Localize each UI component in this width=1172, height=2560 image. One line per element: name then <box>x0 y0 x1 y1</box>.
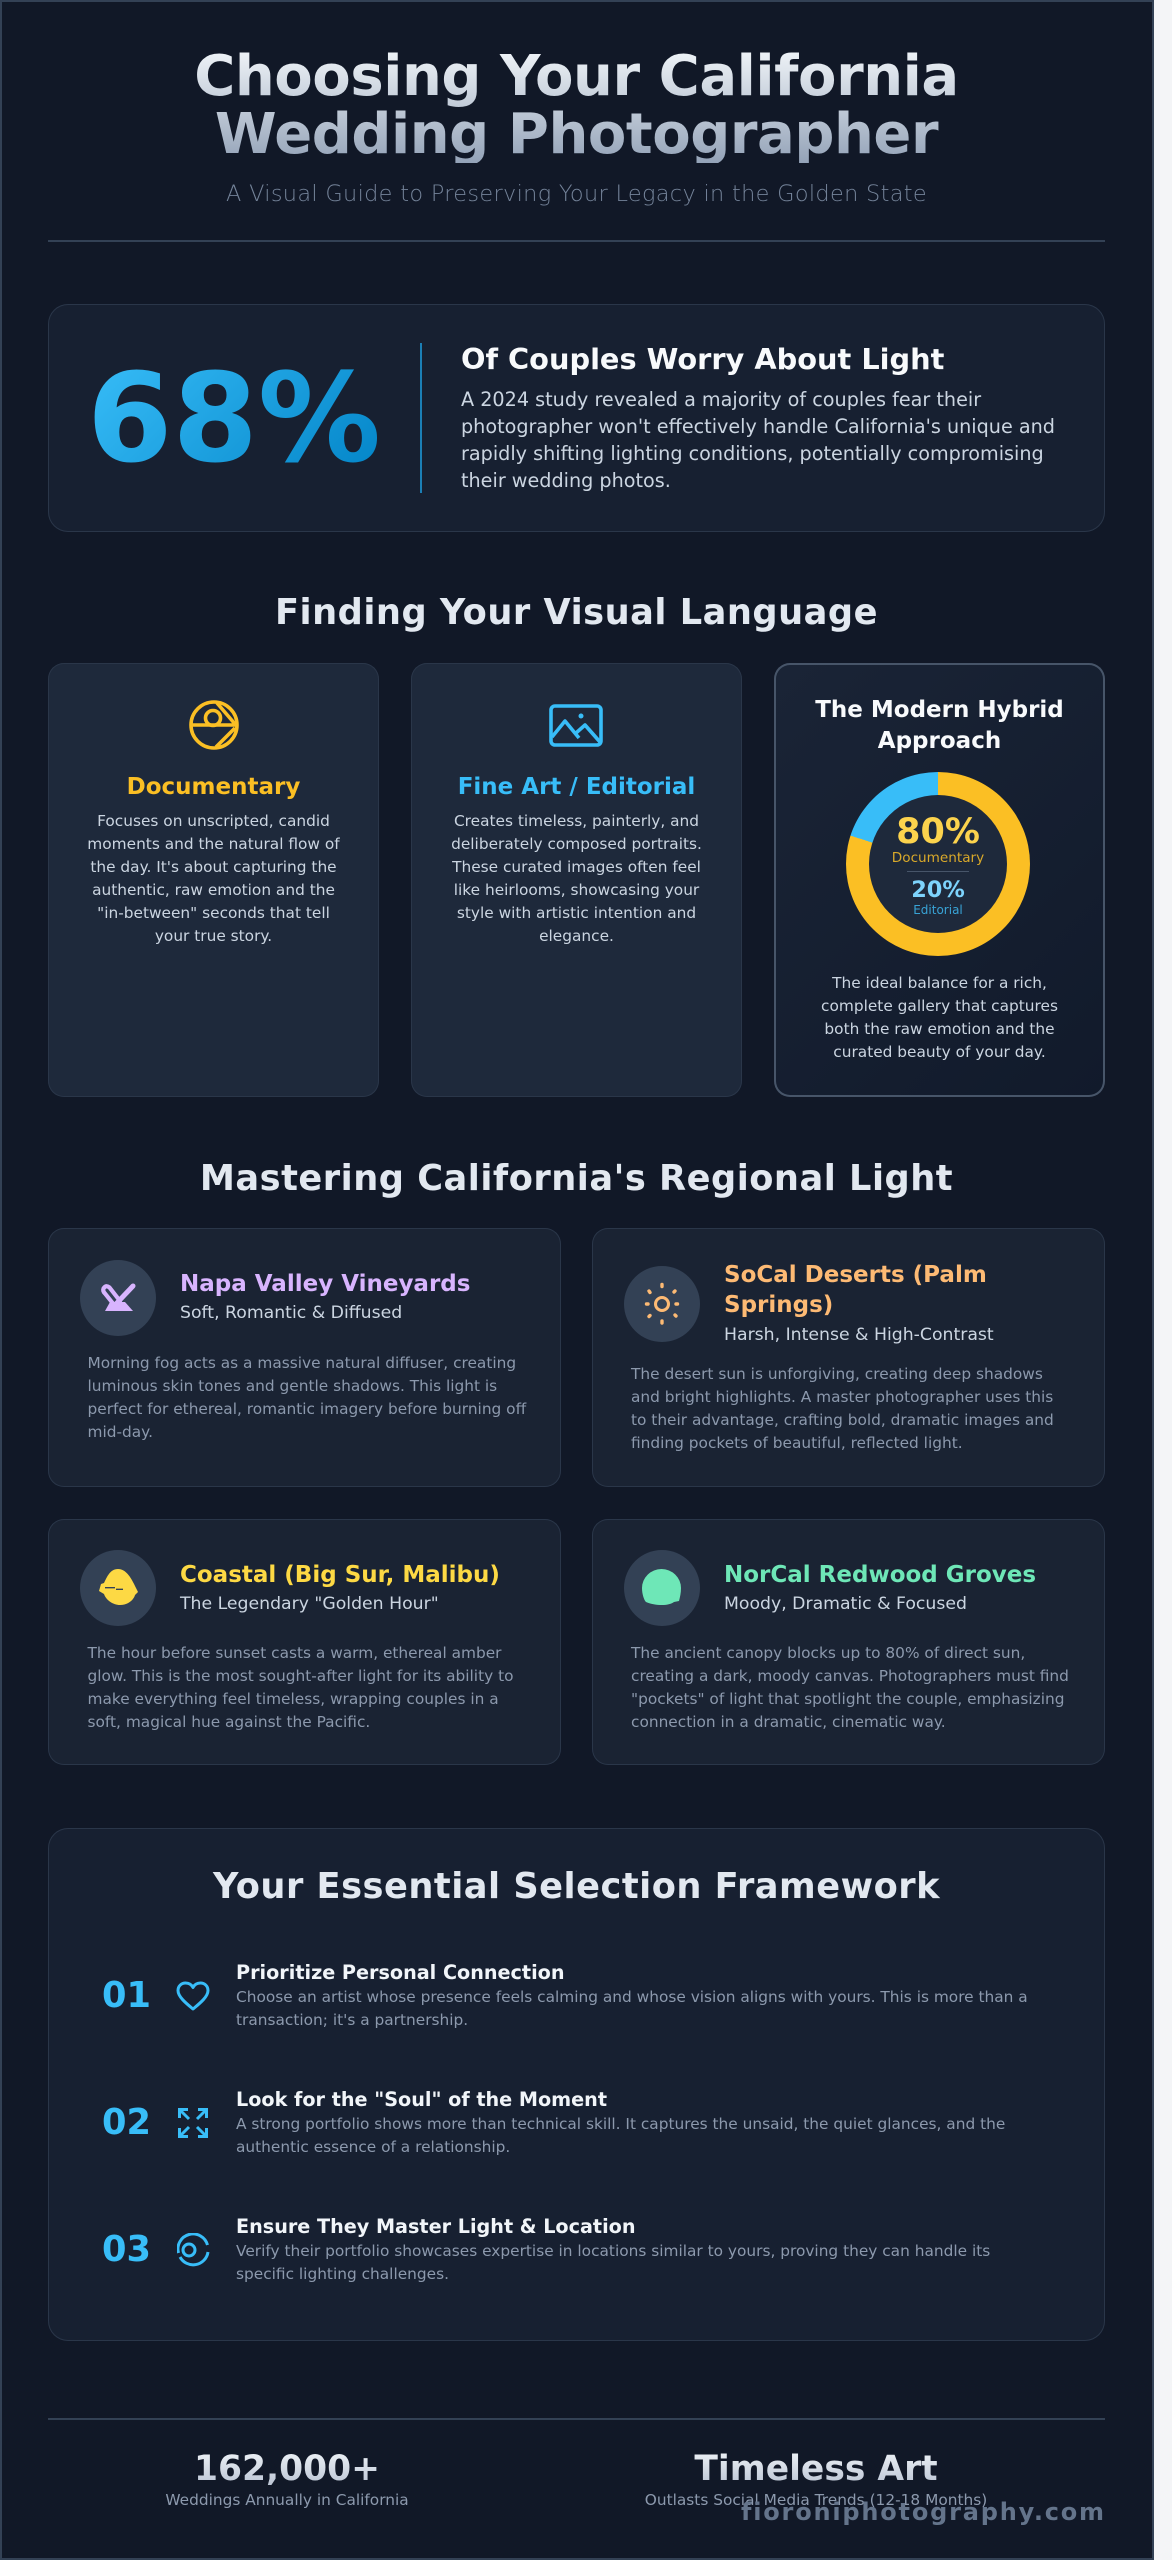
hybrid heading <box>815 696 1064 754</box>
napa subtitle: Soft, Romantic & Diffused <box>180 1303 402 1323</box>
title: Wedding Photographer <box>215 102 938 167</box>
documentary text: the day. It's about capturing the <box>90 858 337 876</box>
napa text: mid-day. <box>88 1423 153 1441</box>
step title: Prioritize Personal Connection <box>236 1961 565 1984</box>
header divider <box>48 240 1105 242</box>
documentary label: Documentary <box>892 850 984 866</box>
hybrid heading: The Modern Hybrid <box>815 696 1064 722</box>
coastal text: glow. This is the most sought-after light for its ability to <box>88 1667 513 1685</box>
number 02: 02 <box>102 2102 151 2143</box>
icon: sun <box>624 1266 700 1342</box>
socal text <box>630 1365 1054 1452</box>
documentary text: authentic, raw emotion and the <box>92 881 335 899</box>
panel: coastal <box>48 1519 561 1765</box>
hero text: A 2024 study revealed a majority of couples fear their <box>461 388 981 411</box>
norcal text <box>630 1644 1069 1731</box>
step text: Verify their portfolio showcases expertise in locations similar to yours, proving they can handle its <box>236 2242 990 2260</box>
coastal text: The hour before sunset casts a warm, ethereal amber <box>88 1644 502 1662</box>
heading: visual language: Finding Your Visual Language <box>275 592 878 633</box>
hero heading: Of Couples Worry About Light <box>461 342 944 376</box>
step 02 <box>102 2088 1005 2156</box>
socal title: SoCal Deserts (Palm <box>724 1262 987 1288</box>
icon: image <box>549 704 603 747</box>
framework heading: Your Essential Selection Framework <box>213 1866 940 1907</box>
coastal text: soft, magical hue against the Pacific. <box>88 1713 370 1731</box>
big stat 68%: 68% <box>87 347 381 490</box>
stat label: Outlasts Social Media Trends (12-18 Months) <box>645 2491 987 2509</box>
heading: regional light: Mastering California's Regional Light <box>200 1158 953 1199</box>
hero text: their wedding photos. <box>461 469 671 492</box>
napa text: Morning fog acts as a massive natural diffuser, creating <box>88 1354 516 1372</box>
icon: wine glasses <box>80 1260 156 1336</box>
socal text: and bright highlights. A master photographer uses this <box>631 1388 1053 1406</box>
norcal text: "pockets" of light that spotlight the couple, emphasizing <box>631 1690 1064 1708</box>
fine art heading: Fine Art / Editorial <box>458 774 695 800</box>
napa title: Napa Valley Vineyards <box>180 1271 470 1297</box>
number 01: 01 <box>102 1975 151 2016</box>
donut centre <box>869 795 1007 933</box>
donut chart 80/20 <box>846 772 1030 956</box>
icon: heart <box>176 1982 210 2010</box>
stat value <box>576 2449 1056 2489</box>
hybrid text: complete gallery that captures <box>821 997 1058 1015</box>
footer divider <box>48 2418 1105 2420</box>
icon: aperture <box>189 700 239 750</box>
hybrid text: The ideal balance for a rich, <box>832 974 1047 992</box>
documentary text <box>87 812 340 945</box>
stat label: Weddings Annually in California <box>165 2491 409 2509</box>
step text: specific lighting challenges. <box>236 2265 449 2283</box>
documentary text: moments and the natural flow of <box>87 835 340 853</box>
editorial label: Editorial <box>913 903 963 917</box>
coastal text: make everything feel timeless, wrapping couples in a <box>88 1690 499 1708</box>
20 percent value: 20% <box>911 877 965 903</box>
footer stat: timeless art <box>645 2449 987 2509</box>
panel: fine art <box>411 663 742 1097</box>
coastal subtitle: The Legendary "Golden Hour" <box>180 1594 439 1614</box>
fine art text: elegance. <box>539 927 614 945</box>
socal text: The desert sun is unforgiving, creating deep shadows <box>631 1365 1043 1383</box>
documentary text: "in-between" seconds that tell <box>97 904 330 922</box>
hybrid text <box>821 974 1058 1061</box>
panel: norcal <box>592 1519 1105 1765</box>
socal text: finding pockets of beautiful, reflected light. <box>631 1434 963 1452</box>
panel: hybrid approach <box>774 663 1105 1097</box>
norcal text: creating a dark, moody canvas. Photographers must find <box>631 1667 1069 1685</box>
step title: Look for the "Soul" of the Moment <box>236 2088 607 2111</box>
hybrid text: curated beauty of your day. <box>833 1043 1046 1061</box>
norcal text: connection in a dramatic, cinematic way. <box>631 1713 946 1731</box>
norcal text: The ancient canopy blocks up to 80% of direct sun, <box>631 1644 1025 1662</box>
panel: napa <box>48 1228 561 1487</box>
fine art text: Creates timeless, painterly, and <box>454 812 699 830</box>
documentary text: your true story. <box>155 927 272 945</box>
napa text: perfect for ethereal, romantic imagery before burning off <box>88 1400 526 1418</box>
step text <box>236 2114 1005 2156</box>
icon: location focus <box>177 2233 210 2266</box>
title: Choosing Your California <box>194 44 959 109</box>
stat value: 162,000+ <box>194 2449 380 2489</box>
step 01 <box>102 1961 1028 2029</box>
step text: A strong portfolio shows more than technical skill. It captures the unsaid, the quiet glances, and the <box>236 2114 1005 2132</box>
stat value <box>47 2449 527 2489</box>
socal title: Springs) <box>724 1292 833 1318</box>
panel: socal <box>592 1228 1105 1487</box>
norcal title: NorCal Redwood Groves <box>724 1562 1036 1588</box>
hybrid text: both the raw emotion and the <box>824 1020 1055 1038</box>
documentary text: Focuses on unscripted, candid <box>97 812 330 830</box>
step text <box>236 2242 990 2283</box>
step title: Ensure They Master Light & Location <box>236 2215 636 2238</box>
fine art text: These curated images often feel <box>452 858 701 876</box>
socal title <box>724 1262 987 1318</box>
watermark: fioroniphotography.com <box>741 2498 1106 2526</box>
panel: documentary <box>48 663 379 1097</box>
footer stat: weddings <box>165 2449 409 2509</box>
step text <box>236 1988 1028 2029</box>
vertical accent line <box>420 343 422 493</box>
coastal text <box>87 1644 513 1731</box>
napa text <box>88 1354 526 1441</box>
stat value: Timeless Art <box>694 2449 938 2489</box>
title <box>48 48 1105 163</box>
subtitle: A Visual Guide to Preserving Your Legacy in the Golden State <box>226 181 927 207</box>
number 03: 03 <box>102 2229 151 2270</box>
socal text: to their advantage, crafting bold, dramatic images and <box>631 1411 1054 1429</box>
documentary heading: Documentary <box>127 774 300 800</box>
fine art text: style with artistic intention and <box>457 904 696 922</box>
fine art text <box>451 812 702 945</box>
hybrid heading: Approach <box>878 728 1001 754</box>
norcal subtitle: Moody, Dramatic & Focused <box>724 1594 967 1614</box>
panel: selection framework <box>48 1828 1105 2341</box>
icon: sunset <box>80 1550 156 1626</box>
fine art text: deliberately composed portraits. <box>451 835 702 853</box>
icon: expand arrows <box>178 2108 208 2138</box>
step text: transaction; it's a partnership. <box>236 2011 468 2029</box>
header <box>194 44 959 207</box>
socal subtitle: Harsh, Intense & High-Contrast <box>724 1324 994 1344</box>
hero text: photographer won't effectively handle California's unique and <box>461 415 1055 438</box>
coastal title: Coastal (Big Sur, Malibu) <box>180 1562 500 1588</box>
step 03 <box>102 2215 990 2283</box>
hero text: rapidly shifting lighting conditions, potentially compromising <box>461 442 1044 465</box>
fine art text: like heirlooms, showcasing your <box>454 881 699 899</box>
napa text: luminous skin tones and gentle shadows. This light is <box>88 1377 497 1395</box>
donut divider <box>907 871 969 872</box>
panel: hero stat <box>48 304 1105 532</box>
icon: tree canopy <box>624 1550 700 1626</box>
step text: authentic essence of a relationship. <box>236 2138 510 2156</box>
step text: Choose an artist whose presence feels calming and whose vision aligns with yours. This is more than a <box>236 1988 1028 2006</box>
hero text <box>461 388 1055 492</box>
80 percent value: 80% <box>896 812 980 852</box>
